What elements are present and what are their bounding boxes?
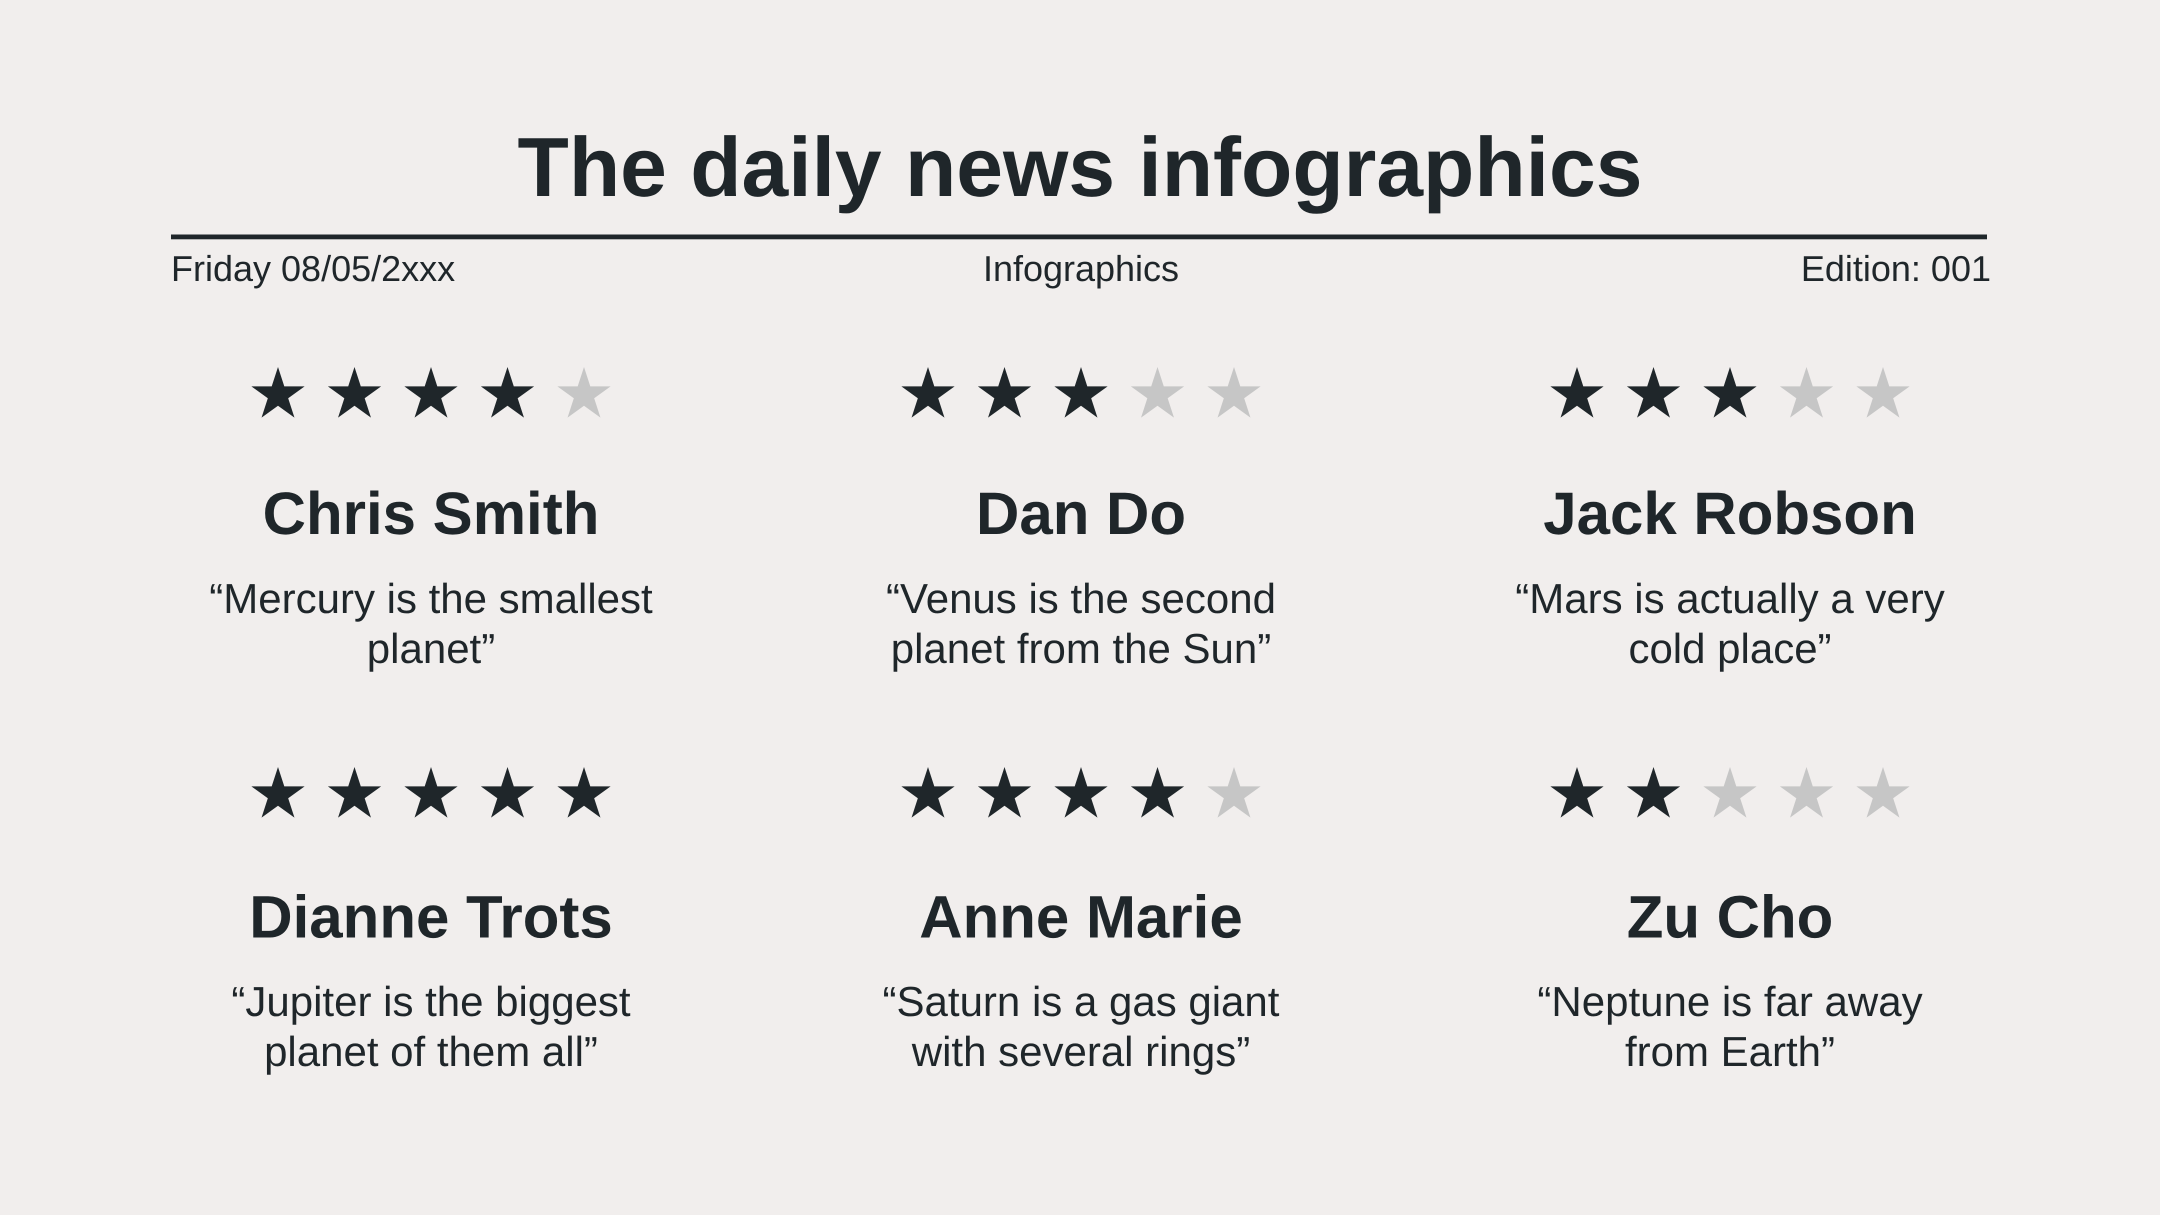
name: Anne Marie <box>919 884 1243 950</box>
name: Jack Robson <box>1543 480 1917 547</box>
quote: from Earth” <box>1625 1028 1835 1075</box>
name: Chris Smith <box>263 480 599 547</box>
panel: Dianne Trots <box>231 767 631 1075</box>
panel: Chris Smith <box>209 367 653 672</box>
quote: “Saturn is a gas giant <box>883 978 1280 1025</box>
panel: Dan Do <box>886 367 1276 672</box>
section label: Infographics <box>983 248 1179 289</box>
panel: Zu Cho <box>1537 767 1923 1075</box>
quote: planet from the Sun” <box>891 625 1271 672</box>
quote: planet” <box>367 625 495 672</box>
name: Dan Do <box>976 480 1186 547</box>
rating: 3 of 5 stars <box>901 367 1261 418</box>
quote: with several rings” <box>911 1028 1250 1075</box>
quote: “Mercury is the smallest <box>209 575 653 622</box>
date: Friday 08/05/2xxx <box>171 248 455 289</box>
quote: “Mars is actually a very <box>1515 575 1945 622</box>
panel: Jack Robson <box>1515 367 1945 672</box>
name: Dianne Trots <box>249 884 613 950</box>
title: The daily news infographics <box>518 120 1642 214</box>
rating: 4 of 5 stars <box>901 767 1261 818</box>
rating: 2 of 5 stars <box>1550 767 1910 818</box>
panel: Anne Marie <box>883 767 1280 1075</box>
quote: planet of them all” <box>264 1028 598 1075</box>
edition: Edition: 001 <box>1801 248 1991 289</box>
quote: cold place” <box>1628 625 1832 672</box>
rating: 5 of 5 stars <box>251 767 611 818</box>
name: Zu Cho <box>1627 884 1833 950</box>
quote: “Neptune is far away <box>1537 978 1923 1025</box>
rating: 4 of 5 stars <box>251 367 611 418</box>
quote: “Venus is the second <box>886 575 1276 622</box>
quote: “Jupiter is the biggest <box>231 978 631 1025</box>
rating: 3 of 5 stars <box>1550 367 1910 418</box>
